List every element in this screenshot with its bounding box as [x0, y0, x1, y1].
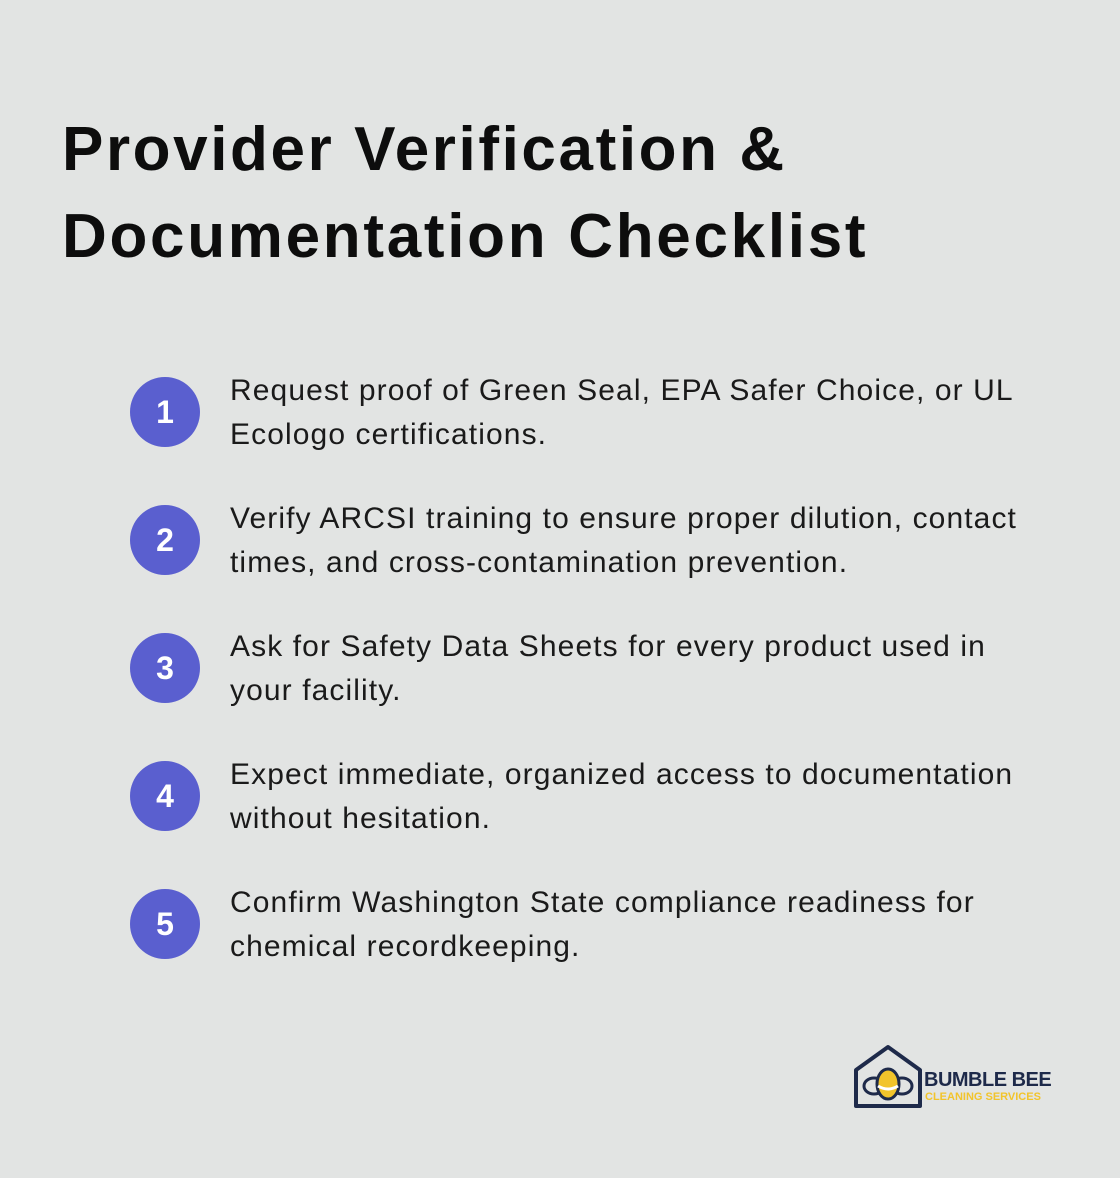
logo: CLEANING SERVICES: [925, 1091, 1041, 1103]
item 1: 1: [156, 394, 174, 430]
item 2: [130, 502, 1017, 579]
item 2: 2: [156, 522, 174, 558]
item 5: 5: [156, 906, 174, 942]
item 1: [130, 374, 1014, 451]
title: [62, 115, 868, 271]
item 3: Ask for Safety Data Sheets for every product used in: [230, 630, 986, 663]
logo text: BUMBLE BEE: [924, 1069, 1051, 1091]
item 1: Ecologo certifications.: [230, 418, 547, 451]
item 5: chemical recordkeeping.: [230, 930, 580, 963]
item 3: [130, 630, 986, 707]
item 3: your facility.: [230, 674, 402, 707]
item 4: without hesitation.: [230, 802, 491, 835]
item 4: Expect immediate, organized access to documentation: [230, 758, 1013, 791]
item 2: Verify ARCSI training to ensure proper dilution, contact: [230, 502, 1017, 535]
item 3: 3: [156, 650, 174, 686]
logo: [854, 1045, 1051, 1108]
item 1: Request proof of Green Seal, EPA Safer Choice, or UL: [230, 374, 1014, 407]
item 5: [130, 886, 975, 963]
item 4: 4: [156, 778, 174, 814]
icon: bee house: [854, 1045, 922, 1108]
title: Documentation Checklist: [62, 202, 868, 271]
item 2: times, and cross-contamination prevention.: [230, 546, 848, 579]
item 5: Confirm Washington State compliance readiness for: [230, 886, 975, 919]
title: Provider Verification &: [62, 115, 787, 184]
item 4: [130, 758, 1013, 835]
